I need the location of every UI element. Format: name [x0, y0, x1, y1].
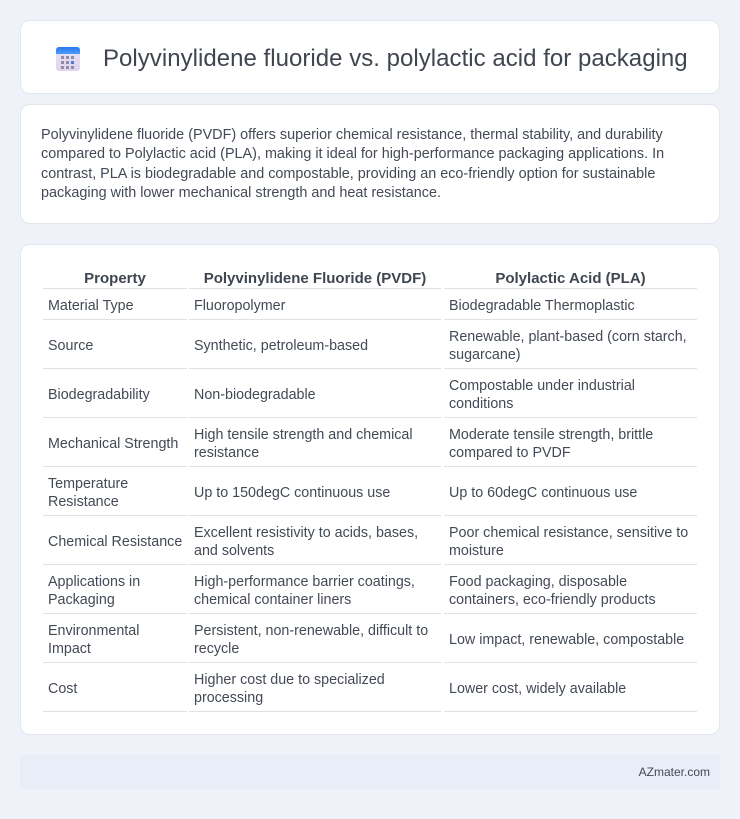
- row: Cost: [43, 672, 697, 712]
- row: Mechanical Strength: resistance: [194, 445, 259, 461]
- header panel: [20, 20, 720, 94]
- row: Biodegradability: Compostable under industrial: [449, 378, 635, 394]
- row: Chemical Resistance: Chemical Resistance: [48, 534, 182, 550]
- row: Cost: Cost: [48, 681, 77, 697]
- row: Applications in Packaging: Food packaging, disposable: [449, 574, 627, 590]
- row: Environmental Impact: [43, 623, 697, 663]
- row: Material Type: Material Type: [48, 298, 134, 314]
- row: Source: sugarcane): [449, 347, 521, 363]
- row: Source: Source: [48, 338, 93, 354]
- row: Applications in Packaging: Packaging: [48, 592, 115, 608]
- row: Environmental Impact: recycle: [194, 641, 239, 657]
- row: Source: [43, 329, 697, 369]
- row: Temperature Resistance: [43, 476, 697, 516]
- summary text: packaging with lower mechanical strength and heat resistance.: [41, 185, 441, 201]
- row: Source: Synthetic, petroleum-based: [194, 338, 368, 354]
- row: Cost: Higher cost due to specialized: [194, 672, 385, 688]
- row: Material Type: Biodegradable Thermoplastic: [449, 298, 635, 314]
- row: Material Type: Fluoropolymer: [194, 298, 285, 314]
- title: Polyvinylidene fluoride vs. polylactic acid for packaging: [103, 45, 688, 72]
- row: Environmental Impact: Environmental: [48, 623, 139, 639]
- row: Biodegradability: [43, 378, 697, 418]
- footer credit: AZmater.com: [639, 765, 710, 779]
- footer bar: [20, 755, 720, 789]
- row: Mechanical Strength: Moderate tensile strength, brittle: [449, 427, 653, 443]
- table header: Polyvinylidene Fluoride (PVDF): [204, 270, 426, 287]
- row: Cost: Lower cost, widely available: [449, 681, 626, 697]
- row: Applications in Packaging: Applications in: [48, 574, 140, 590]
- row: Mechanical Strength: High tensile strength and chemical: [194, 427, 413, 443]
- row: Material Type: [43, 298, 697, 320]
- row: Temperature Resistance: Temperature: [48, 476, 128, 492]
- table header: Polylactic Acid (PLA): [495, 270, 646, 287]
- row: Chemical Resistance: moisture: [449, 543, 504, 559]
- table header: Property: [84, 270, 146, 287]
- row: Chemical Resistance: [43, 525, 697, 565]
- table header: [43, 270, 697, 289]
- row: Mechanical Strength: compared to PVDF: [449, 445, 571, 461]
- row: Applications in Packaging: containers, eco-friendly products: [449, 592, 656, 608]
- row: Chemical Resistance: and solvents: [194, 543, 274, 559]
- row: Environmental Impact: Persistent, non-renewable, difficult to: [194, 623, 428, 639]
- summary text: [41, 127, 664, 201]
- row: Mechanical Strength: Mechanical Strength: [48, 436, 178, 452]
- row: Temperature Resistance: Up to 60degC continuous use: [449, 485, 637, 501]
- row: Applications in Packaging: [43, 574, 697, 614]
- row: Environmental Impact: Low impact, renewable, compostable: [449, 632, 684, 648]
- row: Applications in Packaging: High-performance barrier coatings,: [194, 574, 415, 590]
- row: Applications in Packaging: chemical container liners: [194, 592, 351, 608]
- summary panel: [20, 104, 720, 224]
- row: Biodegradability: Biodegradability: [48, 387, 150, 403]
- row: Chemical Resistance: Excellent resistivity to acids, bases,: [194, 525, 418, 541]
- summary text: contrast, PLA is biodegradable and compostable, providing an eco-friendly option for sustainable: [41, 166, 655, 182]
- icon: calendar: [56, 47, 80, 71]
- row: Source: Renewable, plant-based (corn starch,: [449, 329, 687, 345]
- row: Mechanical Strength: [43, 427, 697, 467]
- row: Biodegradability: conditions: [449, 396, 513, 412]
- row: Chemical Resistance: Poor chemical resistance, sensitive to: [449, 525, 688, 541]
- comparison table panel: [20, 244, 720, 735]
- row: Environmental Impact: Impact: [48, 641, 91, 657]
- summary text: Polyvinylidene fluoride (PVDF) offers superior chemical resistance, thermal stability, and durability: [41, 127, 663, 143]
- row: Cost: processing: [194, 690, 263, 706]
- summary text: compared to Polylactic acid (PLA), making it ideal for high-performance packaging applications. In: [41, 146, 664, 162]
- row: Biodegradability: Non-biodegradable: [194, 387, 316, 403]
- row: Temperature Resistance: Up to 150degC continuous use: [194, 485, 390, 501]
- row: Temperature Resistance: Resistance: [48, 494, 119, 510]
